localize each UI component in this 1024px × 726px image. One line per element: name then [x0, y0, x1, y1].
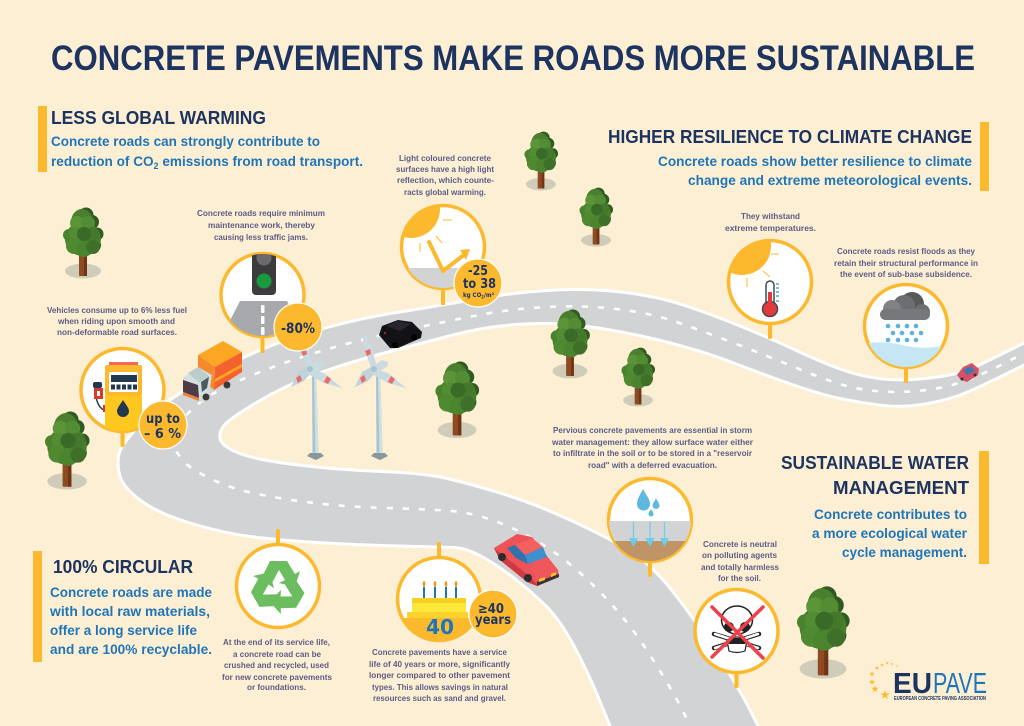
- panel: less global warming: 2: [154, 161, 159, 171]
- panel: less global warming: reduction of CO: [51, 154, 153, 169]
- tree: [45, 411, 90, 490]
- panel: 100% circular: 100% CIRCULAR: [53, 556, 193, 577]
- text: light reflection: surfaces have a high light: [396, 164, 494, 174]
- panel: 100% circular: with local raw materials,: [49, 604, 210, 619]
- tree: [551, 310, 590, 378]
- text: service life: resources such as sand and gravel.: [373, 693, 506, 703]
- panel: 100% circular: offer a long service life: [50, 623, 197, 638]
- text: neutral on pollutants: on polluting agents: [702, 550, 777, 560]
- text: pervious pavements: [551, 425, 754, 470]
- text: light reflection: reflection, which counte-: [397, 175, 494, 185]
- logo: EUPAVE: [869, 661, 987, 702]
- text: neutral on pollutants: for the soil.: [718, 573, 761, 583]
- text: neutral on pollutants: [701, 539, 779, 583]
- tree: [524, 132, 558, 191]
- callout: sun reflection: to 38: [463, 276, 496, 292]
- wind turbine right: [355, 332, 406, 460]
- tree: [621, 348, 655, 407]
- text: neutral on pollutants: and totally harmless: [701, 562, 779, 572]
- panel: less global warming: Concrete roads can strongly contribute to: [51, 134, 320, 149]
- text: fuel saving: Vehicles consume up to 6% less fuel: [47, 305, 187, 315]
- tree: [579, 188, 613, 247]
- panel: sustainable water management: Concrete contributes to: [814, 507, 967, 522]
- text: extreme temperatures: They withstand: [741, 211, 800, 221]
- text: traffic jams: [197, 208, 325, 242]
- text: service life: longer compared to other pavement: [369, 670, 510, 680]
- panel: higher resilience: HIGHER RESILIENCE TO CLIMATE CHANGE: [608, 126, 972, 147]
- logo: EUPAVE: EU: [893, 668, 932, 700]
- logo: EUPAVE: EUROPEAN CONCRETE PAVING ASSOCIATION: [894, 696, 986, 702]
- text: fuel saving: [47, 305, 187, 337]
- vehicle: orange truck: [183, 341, 242, 402]
- text: floods: Concrete roads resist floods as they: [837, 246, 975, 256]
- panel: higher resilience: change and extreme meteorological events.: [688, 173, 972, 188]
- callout: birthday cake: [396, 542, 517, 644]
- panel: 100% circular: and are 100% recyclable.: [50, 642, 212, 657]
- callout: fuel pump: up to: [146, 412, 180, 427]
- text: fuel saving: when riding upon smooth and: [57, 316, 175, 326]
- text: floods: retain their structural performance in: [834, 258, 978, 268]
- callout: fuel pump: – 6 %: [144, 427, 181, 442]
- text: service life: [369, 647, 510, 703]
- text: extreme temperatures: [725, 211, 816, 233]
- text: floods: the event of sub-base subsidence.: [840, 269, 972, 279]
- callout: rain cloud: [862, 284, 950, 383]
- vehicle: black car: [379, 320, 422, 348]
- callout: fuel pump: [81, 348, 187, 449]
- text: light reflection: Light coloured concrete: [399, 153, 491, 163]
- callout: birthday cake: ≥40: [478, 601, 504, 617]
- callout: sun reflection: 2: [481, 294, 484, 300]
- text: pervious pavements: water management: they allow surface water either: [551, 437, 754, 447]
- panel: 100% circular: Concrete roads are made: [50, 585, 212, 600]
- text: recycling: [222, 637, 332, 692]
- road: [118, 289, 1024, 726]
- panel: less global warming: LESS GLOBAL WARMING: [51, 107, 266, 128]
- panel: sustainable water management: [781, 451, 989, 564]
- panel: sustainable water management: a more ecological water: [812, 526, 968, 541]
- panel: higher resilience: Concrete roads show better resilience to climate: [658, 154, 972, 169]
- text: recycling: At the end of its service life,: [223, 637, 330, 647]
- text: traffic jams: Concrete roads require minimum: [197, 208, 325, 218]
- callout: sun reflection: [400, 204, 502, 308]
- callout: traffic light: [220, 245, 322, 353]
- text: traffic jams: causing less traffic jams.: [214, 232, 308, 242]
- text: neutral on pollutants: Concrete is neutral: [703, 539, 777, 549]
- panel: higher resilience: [608, 122, 989, 191]
- callout: birthday cake: years: [475, 613, 511, 628]
- callout: sun reflection: -25: [468, 263, 488, 279]
- callout: skull no pollutants: [695, 590, 778, 688]
- text: service life: life of 40 years or more, significantly: [369, 659, 510, 669]
- text: extreme temperatures: extreme temperatures.: [725, 223, 816, 233]
- text: floods: [834, 246, 978, 279]
- panel: less global warming: emissions from road transport.: [159, 154, 363, 169]
- text: pervious pavements: road" with a deferred evacuation.: [588, 460, 717, 470]
- text: service life: Concrete pavements have a service: [372, 647, 507, 657]
- text: recycling: for new concrete pavements: [222, 672, 332, 682]
- panel: 100% circular: [33, 551, 212, 662]
- panel: sustainable water management: MANAGEMENT: [833, 477, 970, 498]
- text: service life: types. This allows savings in natural: [372, 682, 508, 692]
- tree: [435, 361, 479, 438]
- panel: sustainable water management: SUSTAINABLE WATER: [781, 452, 969, 473]
- text: recycling: a concrete road can be: [233, 649, 321, 659]
- callout: traffic light: -80%: [281, 321, 315, 337]
- text: recycling: or foundations.: [247, 682, 306, 692]
- text: pervious pavements: Pervious concrete pavements are essential in storm: [553, 425, 752, 435]
- text: light reflection: [396, 153, 494, 197]
- callout: recycling symbol: [236, 529, 320, 628]
- text: recycling: crushed and recycled, used: [224, 660, 329, 670]
- text: pervious pavements: to infiltrate in the soil or to be stored in a "reservoir: [553, 448, 753, 458]
- text: fuel saving: non-deformable road surfaces.: [57, 327, 177, 337]
- tree: [797, 586, 850, 679]
- callout: water infiltration: [605, 478, 695, 577]
- callout: sun reflection: kg CO: [463, 292, 483, 299]
- callout: sun reflection: /m²: [484, 292, 494, 299]
- callout: thermometer: [726, 238, 814, 339]
- text: traffic jams: maintenance work, thereby: [208, 220, 315, 230]
- vehicle: pink car: [957, 363, 979, 382]
- panel: sustainable water management: cycle management.: [842, 545, 967, 560]
- text: light reflection: racts global warming.: [404, 187, 486, 197]
- logo: EUPAVE: PAVE: [933, 668, 987, 700]
- wind turbine left: [291, 332, 342, 460]
- panel: less global warming: [38, 106, 363, 172]
- vehicle: red car: [494, 534, 559, 586]
- callout: birthday cake: 40: [426, 615, 454, 639]
- tree: [63, 208, 104, 278]
